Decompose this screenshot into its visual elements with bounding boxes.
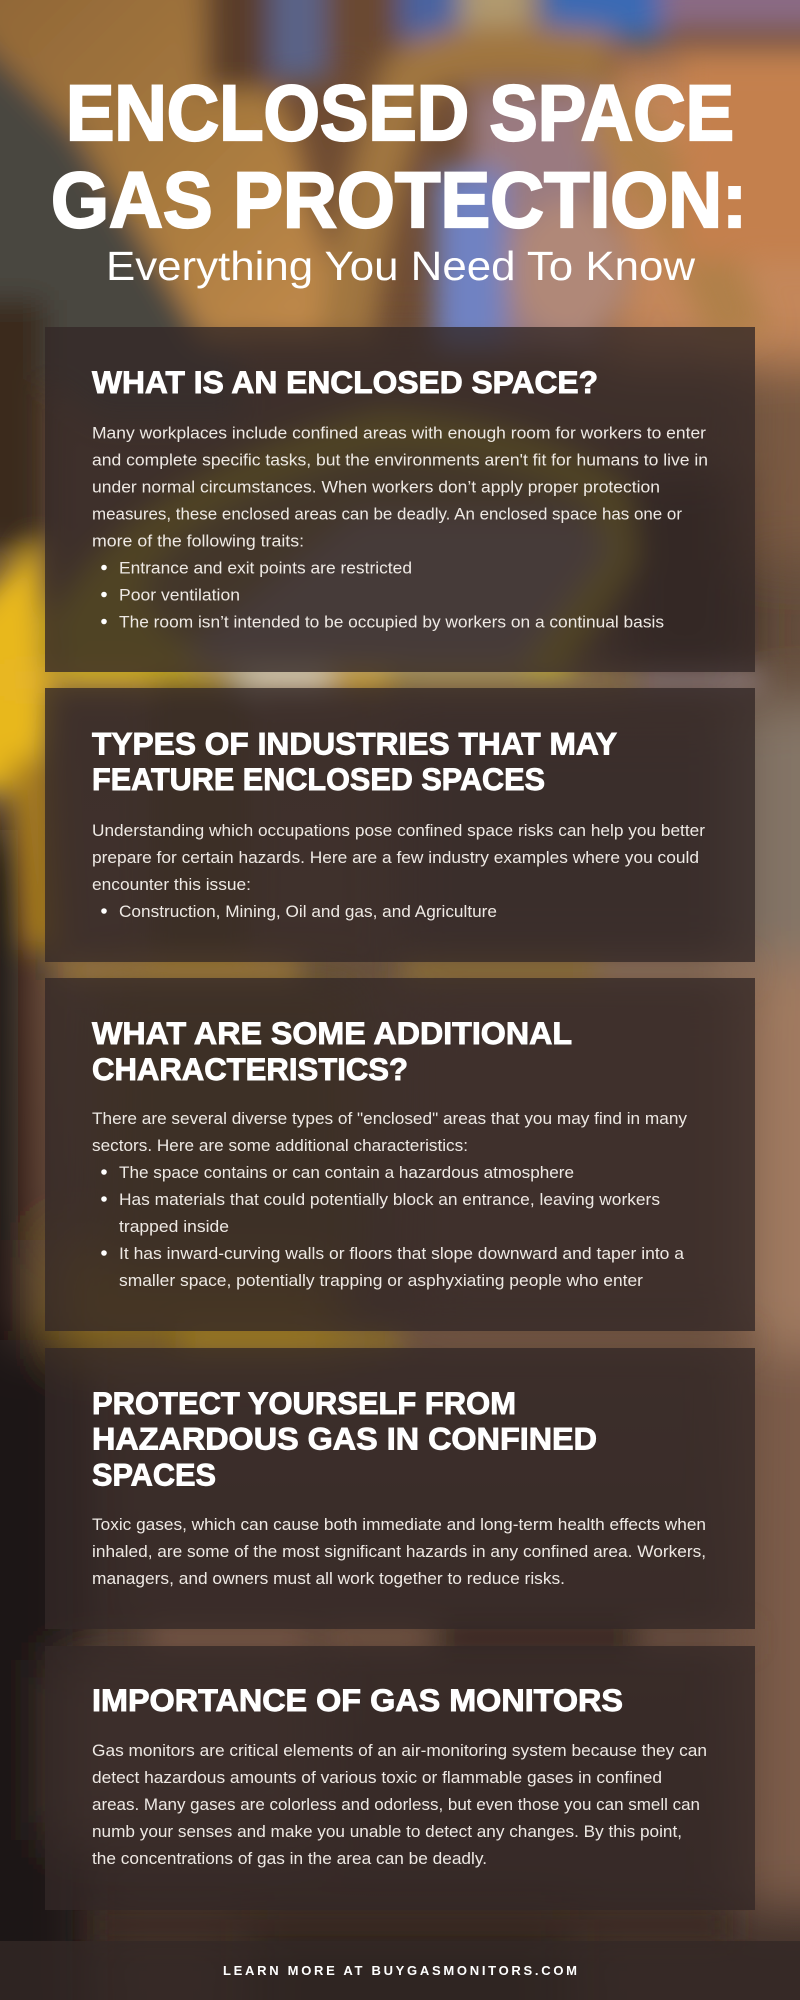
bullet list: characteristics: It has inward-curving walls or floors that slope downward and taper into a <box>119 1245 685 1263</box>
decorative under-panel yellow case shapes <box>50 410 640 680</box>
text block: industries intro: prepare for certain hazards. Here are a few industry examples where you could <box>92 849 699 867</box>
bullet list: characteristics: Has materials that could potentially block an entrance, leaving workers <box>119 1191 660 1209</box>
text block: definition: measures, these enclosed areas can be deadly. An enclosed space has one or <box>92 506 683 524</box>
bullet list: characteristics: smaller space, potentially trapping or asphyxiating people who enter <box>119 1272 644 1290</box>
text block: toxic gases: Toxic gases, which can cause both immediate and long-term health effects when <box>92 1516 706 1534</box>
text block: characteristics intro: sectors. Here are some additional characteristics: <box>92 1137 468 1155</box>
text block: definition: and complete specific tasks, but the environments aren't fit for humans to live in <box>92 452 708 470</box>
bullet list: traits: The room isn’t intended to be occupied by workers on a continual basis <box>119 614 664 632</box>
panel: protect yourself <box>45 1348 755 1629</box>
heading: protect yourself: HAZARDOUS GAS IN CONFINED <box>92 1420 597 1456</box>
heading: additional characteristics: CHARACTERISTICS? <box>92 1051 408 1087</box>
text block: characteristics intro: There are several diverse types of "enclosed" areas that you may find in many <box>92 1110 688 1128</box>
panel: importance of gas monitors <box>45 1646 755 1910</box>
text block: definition: under normal circumstances. When workers don’t apply proper protection <box>92 478 660 496</box>
text block: gas monitors: areas. Many gases are colorless and odorless, but even those you can smell can <box>92 1796 700 1814</box>
text block: gas monitors: numb your senses and make you unable to detect any changes. By this point, <box>92 1823 682 1841</box>
text block: industries intro: Understanding which occupations pose confined space risks can help you better <box>92 822 706 840</box>
title: ENCLOSED SPACE <box>66 68 734 157</box>
heading: importance of gas monitors: IMPORTANCE OF GAS MONITORS <box>92 1682 623 1718</box>
heading: additional characteristics: WHAT ARE SOME ADDITIONAL <box>92 1015 572 1051</box>
bullet list: characteristics: trapped inside <box>119 1218 229 1236</box>
bullet list: industries: Construction, Mining, Oil and gas, and Agriculture <box>119 903 497 921</box>
bullet list: traits <box>101 560 664 632</box>
title: GAS PROTECTION: <box>51 155 747 244</box>
text block: toxic gases: managers, and owners must all work together to reduce risks. <box>92 1570 565 1588</box>
heading: types of industries <box>92 726 617 797</box>
text block: industries intro: encounter this issue: <box>92 876 251 894</box>
heading: what is an enclosed space: WHAT IS AN ENCLOSED SPACE? <box>92 364 598 400</box>
title <box>51 68 747 244</box>
footer <box>0 1941 800 2000</box>
bullet list: traits: Entrance and exit points are restricted <box>119 560 412 578</box>
text block: definition: Many workplaces include confined areas with enough room for workers to enter <box>92 424 707 442</box>
text block: definition: more of the following traits: <box>92 532 304 550</box>
heading: additional characteristics <box>92 1015 572 1087</box>
text block: toxic gases: inhaled, are some of the most significant hazards in any confined area. Workers, <box>92 1543 706 1561</box>
text block: industries intro <box>92 822 706 894</box>
panel: types of industries <box>45 688 755 962</box>
text block: gas monitors: detect hazardous amounts of various toxic or flammable gases in confined <box>92 1769 662 1787</box>
bullet list: traits: Poor ventilation <box>119 586 240 604</box>
text block: gas monitors: the concentrations of gas in the area can be deadly. <box>92 1850 487 1868</box>
panel: what is an enclosed space <box>45 327 755 672</box>
text block: toxic gases <box>92 1516 706 1588</box>
text block: definition <box>92 424 708 550</box>
subtitle: Everything You Need To Know <box>106 243 695 289</box>
heading: types of industries: TYPES OF INDUSTRIES THAT MAY <box>92 726 617 762</box>
footer link text: LEARN MORE AT BUYGASMONITORS.COM <box>223 1963 577 1978</box>
heading: protect yourself <box>92 1385 597 1492</box>
bullet list: characteristics: The space contains or can contain a hazardous atmosphere <box>119 1164 574 1182</box>
bullet list: characteristics <box>101 1164 685 1290</box>
text block: gas monitors <box>92 1742 707 1868</box>
heading: types of industries: FEATURE ENCLOSED SPACES <box>92 761 545 797</box>
heading: protect yourself: SPACES <box>92 1456 216 1492</box>
heading: protect yourself: PROTECT YOURSELF FROM <box>92 1385 516 1421</box>
panel: additional characteristics <box>45 978 755 1331</box>
text block: gas monitors: Gas monitors are critical elements of an air-monitoring system because they can <box>92 1742 707 1760</box>
text block: characteristics intro <box>92 1110 688 1155</box>
